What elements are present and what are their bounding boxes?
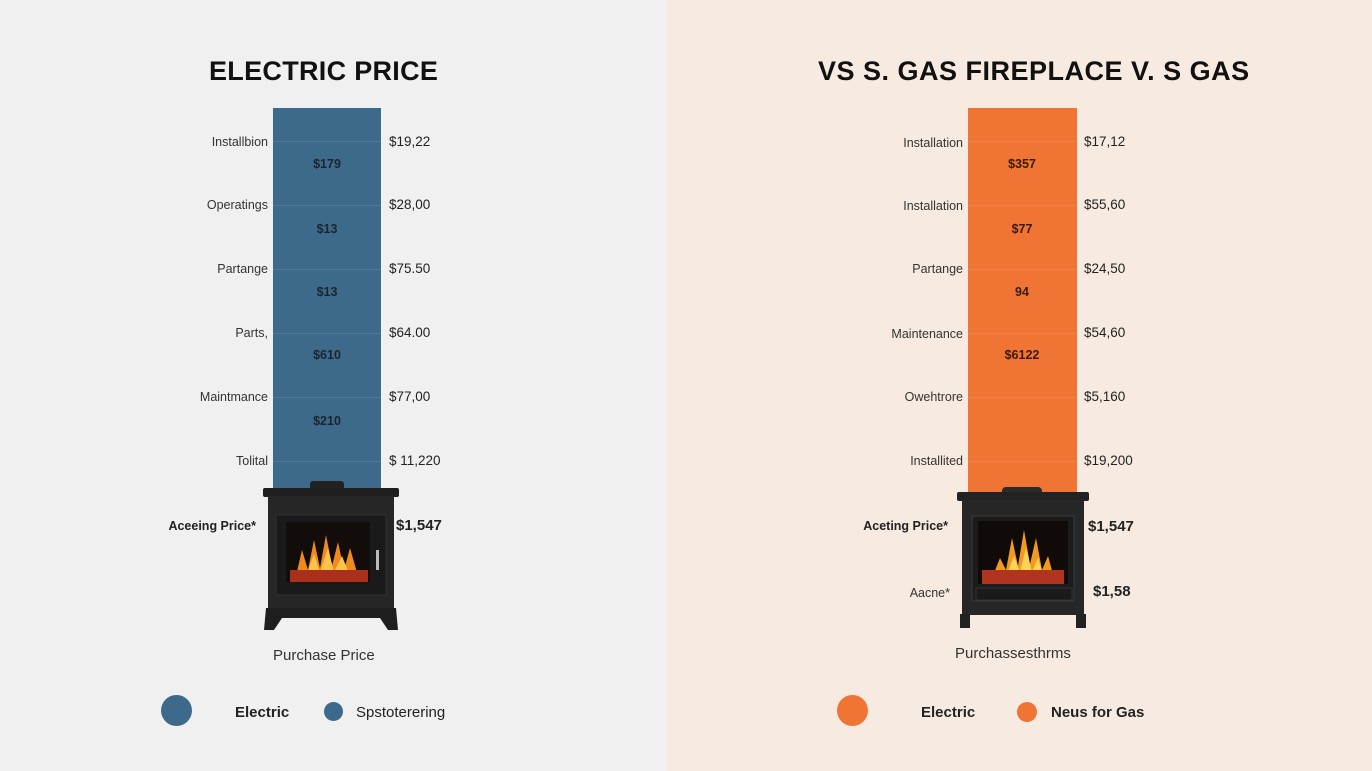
text: $77,00 [389, 389, 430, 404]
title: gas: VS S. GAS FIREPLACE V. S GAS [818, 56, 1250, 86]
bar: gas [968, 108, 1077, 492]
text: $55,60 [1084, 197, 1125, 212]
text: Maintmance [200, 390, 268, 404]
values: gas [1084, 134, 1134, 600]
text: $19,22 [389, 134, 430, 149]
icon: gas stove [957, 487, 1089, 628]
title: electric: ELECTRIC PRICE [209, 56, 438, 86]
text: $19,200 [1084, 453, 1133, 468]
labels: gas [863, 136, 963, 600]
text: Parts, [235, 326, 268, 340]
bar: electric [273, 108, 381, 490]
text: Aceting Price* [863, 519, 948, 533]
icon: electric stove [263, 481, 399, 630]
text: $64.00 [389, 325, 430, 340]
text: Maintenance [891, 327, 963, 341]
legend: electric: Electric [235, 704, 289, 721]
bar: gas: $77 [1012, 222, 1032, 236]
text: $1,547 [396, 517, 442, 534]
bar: gas: $6122 [1005, 348, 1039, 362]
bar: gas: $357 [1008, 157, 1036, 171]
text: Owehtrore [905, 390, 963, 404]
text: $28,00 [389, 197, 430, 212]
bar: electric: $610 [313, 348, 341, 362]
text: $1,547 [1088, 518, 1134, 535]
text: Installation [903, 199, 963, 213]
text: $5,160 [1084, 389, 1125, 404]
bar: electric: $13 [317, 285, 337, 299]
panel: gas background [667, 0, 1372, 771]
bar: electric: $210 [313, 414, 341, 428]
legend: gas: Neus for Gas [1051, 704, 1144, 721]
text: Partange [912, 262, 963, 276]
legend: electric [161, 695, 445, 726]
text: $17,12 [1084, 134, 1125, 149]
text: $1,58 [1093, 583, 1131, 600]
text: Partange [217, 262, 268, 276]
text: $24,50 [1084, 261, 1125, 276]
legend: gas: Electric [921, 704, 975, 721]
caption: gas: Purchassesthrms [955, 645, 1071, 662]
caption: electric: Purchase Price [273, 647, 375, 664]
labels: electric [168, 135, 268, 533]
legend: electric: Spstoterering [356, 704, 445, 721]
values: electric [389, 134, 442, 534]
bar: electric: $13 [317, 222, 337, 236]
bar: gas: 94 [1015, 285, 1029, 299]
panel: electric background [0, 0, 667, 771]
text: $75.50 [389, 261, 430, 276]
text: Installbion [212, 135, 268, 149]
bar: electric: $179 [313, 157, 341, 171]
text: Installited [910, 454, 963, 468]
text: Aacne* [910, 586, 950, 600]
text: $54,60 [1084, 325, 1125, 340]
legend: gas [837, 695, 1144, 726]
text: $ 11,220 [389, 453, 441, 468]
text: Operatings [207, 198, 268, 212]
text: Aceeing Price* [168, 519, 256, 533]
text: Installation [903, 136, 963, 150]
text: Tolital [236, 454, 268, 468]
